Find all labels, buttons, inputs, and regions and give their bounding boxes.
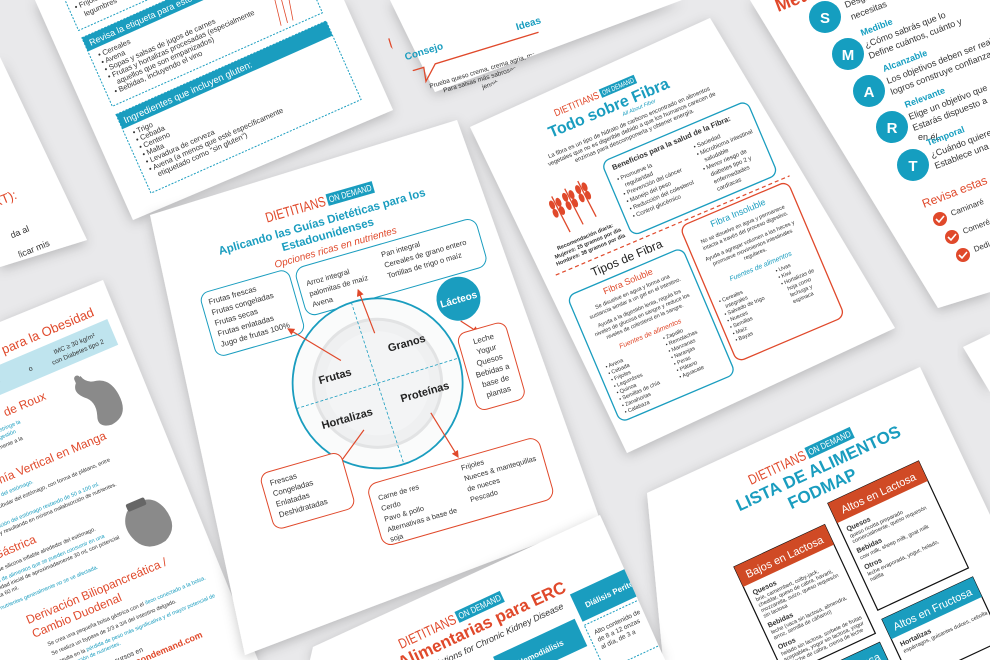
section: duodenal switch [26,557,215,660]
box: insoluble fiber: hoja como [787,277,812,292]
box: Revisa la etiqueta: • Sopas y salsas de jugos de carnes [103,16,217,74]
box: altos en lactosa: Quesos [846,516,872,533]
section: duodenal switch: Se realiza un bypass de 2/3 a 3/4 del intestino delgado. [51,599,178,657]
smart text: logros construye confianza [889,49,990,97]
box: insoluble fiber: integrales [725,295,749,310]
box: granos: Tortillas de trigo o maíz [386,250,463,280]
box: soluble fiber: • Avena [605,357,625,371]
box: altos en lactosa: Otros [863,557,883,571]
box: granos: Pan integral [380,239,421,259]
box: insoluble fiber: • Kiwi [778,270,792,281]
box: frutas: Frutas secas [214,307,259,328]
box: insoluble fiber: • Nueces [726,310,749,324]
box: altos en lactosa: comercialmente, queso requesón [852,505,928,545]
title: vegetales que no es digerible debido a que los humanos carecen de [547,91,717,168]
benefits box: regularidad [624,171,654,189]
box: ingredientes con gluten: • Centeno [138,130,171,151]
recommendation: Recomendación diaria: [556,223,615,252]
box: proteinas: Pavo & pollo [383,504,425,524]
box: insoluble fiber: • Cereales [718,290,744,305]
table headers [483,557,685,660]
box: lacteos: plantas [485,384,512,400]
benefits box: diabetes tipo 2 y [710,156,753,178]
box: frutas: Frutas frescas [207,284,258,307]
logo: DIETITIANS [553,90,601,119]
box: soluble fiber: • Zanahorias [621,392,652,409]
box: insoluble fiber: promueve movimientos intestinales [712,228,794,267]
benefits box: • Microbioma intestinal [696,129,754,158]
title: La fibra es un tipo de hidrato de carbono encontrado en alimentos [548,86,711,160]
box: soluble fiber: • Cebada [608,362,632,377]
box: soluble fiber: • Legumbres [613,372,644,390]
box: altos en lactosa: Altos en Lactosa [839,471,919,517]
plate: Frutas [317,366,353,387]
page: top tips sheet: jengibre, menta, mostaza, perejil, romero [480,50,597,91]
benefits box: • Menor riesgo de [702,149,749,173]
box: soluble fiber: • Manzanas [668,338,697,355]
logo: DIETITIANS [396,611,459,652]
smart letters: R [887,120,898,137]
benefits box: • Saciedad [693,134,722,151]
page: far-left goals sheet: lanificar mis [3,238,51,265]
box: insoluble fiber: • Salvado de trigo [724,296,766,318]
smart letters: A [864,84,875,101]
smart letters: T [908,158,918,175]
box: altos en lactosa [828,461,968,610]
box: altos en lactosa: leche evaporada, yogur, helado, [867,539,941,578]
box: insoluble fiber: Fuentes de alimentos [729,250,793,283]
box: insoluble fiber: • Semillas [729,316,754,331]
page: top tips sheet [388,0,682,98]
box: ingredientes con gluten: Ingredientes que incluyen gluten: [122,59,254,126]
benefits box: • Control glucémico [632,194,683,220]
box: soluble fiber: • Frijoles [610,370,632,383]
box: bajos en lactosa [734,525,875,660]
box: fructosa [840,576,990,660]
box: bajos en lactosa: sin lactosa [763,603,790,620]
box: hortalizas: Enlatadas [275,491,311,509]
page: top tips sheet: Consejo [404,41,445,63]
logo [553,75,638,119]
icon: wheat [549,180,597,232]
box: soluble fiber: Se disuelve en agua y forma una [594,274,672,311]
plate: Hortalizas [320,406,374,432]
checkmarks [933,197,990,262]
plate: Proteínas [399,380,451,405]
box: soluble fiber: Ayuda a la digestión lenta, regula los [597,289,682,329]
box: soluble fiber: sustancia similar a un gel en el intestino. [589,277,682,321]
band: criteria [0,319,118,395]
smart text: Temporal [925,124,966,148]
title: Todo sobre Fibra [546,75,672,142]
benefits box: cardíacas [716,177,743,193]
box: soluble fiber: • Remolachas [665,329,699,348]
box: fructosa: Hortalizas [899,628,933,648]
page: fiber sheet [470,18,895,453]
box: hortalizas: Congeladas [272,478,314,498]
box: ingredientes con gluten: • Cebada [134,123,167,144]
smart text [843,0,990,211]
page: main dietary guidelines sheet [150,120,600,655]
box: soluble fiber [567,248,736,423]
box: altos en lactosa: Bebidas [856,537,883,555]
box: bajos en lactosa: brie, camembert, colby-jack, [755,569,820,603]
box: proteinas: Pescado [469,488,499,504]
benefits box [601,101,778,236]
smart text: ¿Cómo sabrás que lo [863,10,947,50]
title: LISTA DE ALIMENTOS [733,422,904,515]
box: proteinas: Carne de res [377,482,420,502]
title: All About Fiber [621,98,658,118]
box: proteinas: de nueces [466,475,501,494]
arrows [283,261,510,492]
page: kidney disease sheet [310,515,685,660]
smart text: Revisa estas [920,173,989,211]
smart text: Estarás dispuesto a [911,95,989,133]
smart letters: M [842,47,854,64]
page: right edge sheet [963,334,990,392]
smart text: Medible [859,17,894,38]
box: altos en lactosa: queso ricotta preparado [849,510,904,540]
box: Revisa la etiqueta: • Frutas y hortalizas procesadas (especialmente [106,8,256,81]
box: soluble fiber: niveles de colesterol en la sangre. [606,303,685,341]
box: fructosa: espárragos, guisantes dulces, cebolla [903,610,989,655]
box: soluble fiber: • Calabaza [624,399,652,416]
box: insoluble fiber: intacta a través del proceso digestivo. [702,210,790,252]
box: Revisa la etiqueta [82,0,322,106]
box: insoluble fiber: regulares. [743,247,768,262]
box: insoluble fiber: Ayuda a agregar volumen a las heces y [704,220,796,263]
box: bajos en lactosa: Quesos [752,580,778,597]
box: ingredientes con gluten: • Malta [141,141,166,159]
box: ingredientes con gluten: • Trigo [131,120,154,137]
section: sleeve [0,434,116,536]
box: insoluble fiber: espinaca [792,291,816,305]
logo [265,181,375,222]
box: bajos en lactosa: Bajos en Lactosa [744,534,826,581]
box: altos en lactosa: natilla [869,571,886,583]
box: hortalizas: Frescas [269,471,298,488]
benefits box: saludable [704,148,730,163]
smart text: Relevante [903,85,946,110]
box: lacteos: Quesos [475,352,504,368]
plate [292,297,464,470]
box: insoluble fiber: • Uvas [775,263,792,275]
checkmarks: Caminaré [949,197,986,218]
box: hortalizas [259,451,356,530]
box: granos: Avena [311,294,335,309]
page: gluten label sheet [5,0,393,220]
box: soluble fiber: niveles de glucosa en sangre y reduce los [594,293,691,338]
box: insoluble fiber: No se disuelve en agua y permanece [700,204,786,245]
box: hortalizas: Deshidratadas [278,497,329,519]
page: top tips sheet: Prueba queso crema, crema agria, mayonesa o aceite [429,38,581,90]
box: soluble fiber: • Aguacate [679,365,705,381]
box: soluble fiber: • Plátano [676,360,699,374]
recommendation: Hombres: 38 gramos por día [555,233,627,268]
logo [396,589,506,652]
box: soluble fiber: • Quinoa [616,382,638,396]
title: Opciones ricas en nutrientes [273,225,398,271]
box: bajos en lactosa: mozzarella, suizo, queso requesón [760,573,840,614]
box: granos: Arroz integral [305,267,351,288]
icon: stomach 1 [74,376,123,426]
logo: ON DEMAND [601,77,635,97]
logo: DIETITIANS [263,193,327,225]
box: bajos en lactosa: cheddar, queso de cabra, havarti, [758,569,835,609]
benefits box: Beneficios para la salud de la Fibra: [611,114,732,172]
smart text: Establece una [933,141,990,171]
box: soluble fiber: Fuentes de alimentos [618,318,683,351]
box: insoluble fiber: • Maíz [732,326,749,337]
band: criteria: o [28,365,34,373]
logo: ON DEMAND [807,428,853,457]
benefits box: • Manejo del peso [626,181,673,205]
icon: stomach 2 [125,498,172,547]
title: Aplicando las Guías Dietéticas para los [217,187,427,258]
box: Revisa la etiqueta: • Bebidas, incluyendo el vino [113,49,204,96]
box: soluble fiber: Fibra Soluble [602,266,654,296]
title: enzimas para descomponerla y obtener energía. [574,108,696,164]
plate: Granos [387,333,427,355]
box: soluble fiber: • Zapallo [662,328,684,342]
box: proteinas: soja [389,531,405,544]
table headers: Alto contenido de [593,609,642,636]
section: duodenal switch: Cambio Duodenal [30,590,124,641]
table headers: Diálisis Peritoneal [584,572,650,610]
box: ingredientes con gluten: • Avena (a menos que esté específicamente [147,106,285,173]
heading: tipos de fibra: Tipos de Fibra [589,237,665,279]
title: Estadounidenses [280,216,375,254]
section: duodenal switch: Derivación Biliopancreática / [24,555,169,627]
box: lacteos: Leche [472,332,495,346]
box: lacteos: base de [481,373,510,389]
benefits box: • Promueve la [616,163,654,183]
box: frutas: Jugo de frutas 100% [220,320,291,349]
box: insoluble fiber: • Bayas [735,331,754,344]
box: ingredientes con gluten: • Levadura de cerveza [144,127,217,166]
logo: DIETITIANS [746,447,808,488]
page: top tips sheet: Para salsas más sabrosas, agrega hierbas y especias [443,42,594,94]
box: granos [294,217,488,317]
box: frutas [199,269,306,357]
box: lacteos: Bebidas a [475,361,511,380]
smart text: Define cuántos, cuánto y [867,16,964,61]
box: bajos en lactosa: Bebidas [767,612,795,630]
box: proteinas [366,436,555,547]
box: Revisa la etiqueta: aquellos que son empanizados) [115,35,216,86]
box: insoluble fiber: lechuga y [789,284,814,299]
smart letters [809,1,929,181]
box: Revisa la etiqueta: • Cereales [96,37,132,59]
page: obesity surgery sheet [0,280,258,660]
box: insoluble fiber [680,181,845,362]
logo: ON DEMAND [328,183,373,204]
benefits box: • Prevención del cáncer [623,168,683,198]
page: SMART goals sheet [750,0,990,308]
box: lacteos: Yogur [476,342,498,357]
box: bajos en lactosa: helado sin lactosa, sorbete de frutas [780,615,863,658]
box: proteinas: Alternativas a base de [386,506,458,534]
band: criteria: con Diabetes tipo 2 [51,338,105,367]
title: FODMAP [785,465,860,513]
benefits box: enfermedades [713,165,751,186]
smart text: Elige un objetivo que [907,83,989,122]
box: bajos en lactosa: arroz, semilla de cáñamo) [773,609,833,641]
page: FODMAP sheet [647,367,990,660]
box: frutas: Frutas enlatadas [217,314,275,338]
box: ingredientes con gluten: etiquetado como "sin gluten") [156,130,249,178]
icon: lacteos circle [431,272,486,326]
recommendation: Mujeres: 25 gramos por día [554,227,623,261]
smart letters: S [820,10,830,27]
box: granos: palomitas de maíz [308,273,369,298]
box: lacteos [456,321,526,412]
box: fructosa: Altos en Fructosa [892,586,975,633]
box: bajos en lactosa: Otros [777,637,797,651]
page: far-left goals sheet [0,57,87,267]
box: insoluble fiber: Fibra Insoluble [709,197,767,229]
page: top tips sheet: Ideas [515,15,543,33]
box: soluble fiber: • Semillas de chía [618,380,662,403]
smart text: Alcanzable [881,48,929,74]
table headers: al día, de 3 a [600,629,637,651]
box: proteinas: Nueces & mantequillas [463,454,538,483]
table headers: de 8 a 12 onzas [596,617,642,644]
box: proteinas: Cerdo [380,499,402,513]
box: Revisa la etiqueta: • Avena [100,48,127,67]
box: proteinas: Frijoles [460,457,485,472]
icon: lacteos circle: Lácteos [439,290,479,311]
box: altos en lactosa: cow milk, sheep milk, goat milk [859,524,930,561]
logo: ON DEMAND [457,592,503,621]
smart text: en él. [918,132,940,142]
box: granos: Cereales de grano entero [383,238,467,270]
band: criteria: IMC ≥ 30 kg/m² [53,332,97,356]
box: bajos en lactosa: leche (vaca sin lactosa, almendra, [770,595,849,636]
box: insoluble fiber: • Hortalizas de [780,268,815,287]
box: soluble fiber: • Naranjas [670,346,696,361]
section: duodenal switch: Se crea una pequeña bolsa gástrica con el íleon conectado a la bolsa. [47,575,207,648]
benefits box: • Reducción del colesterol [629,180,695,213]
logo [746,425,856,488]
box: ingredientes con gluten [116,21,361,193]
box: soluble fiber: • Peras [673,355,692,368]
box: frutas: Frutas congeladas [211,291,275,317]
